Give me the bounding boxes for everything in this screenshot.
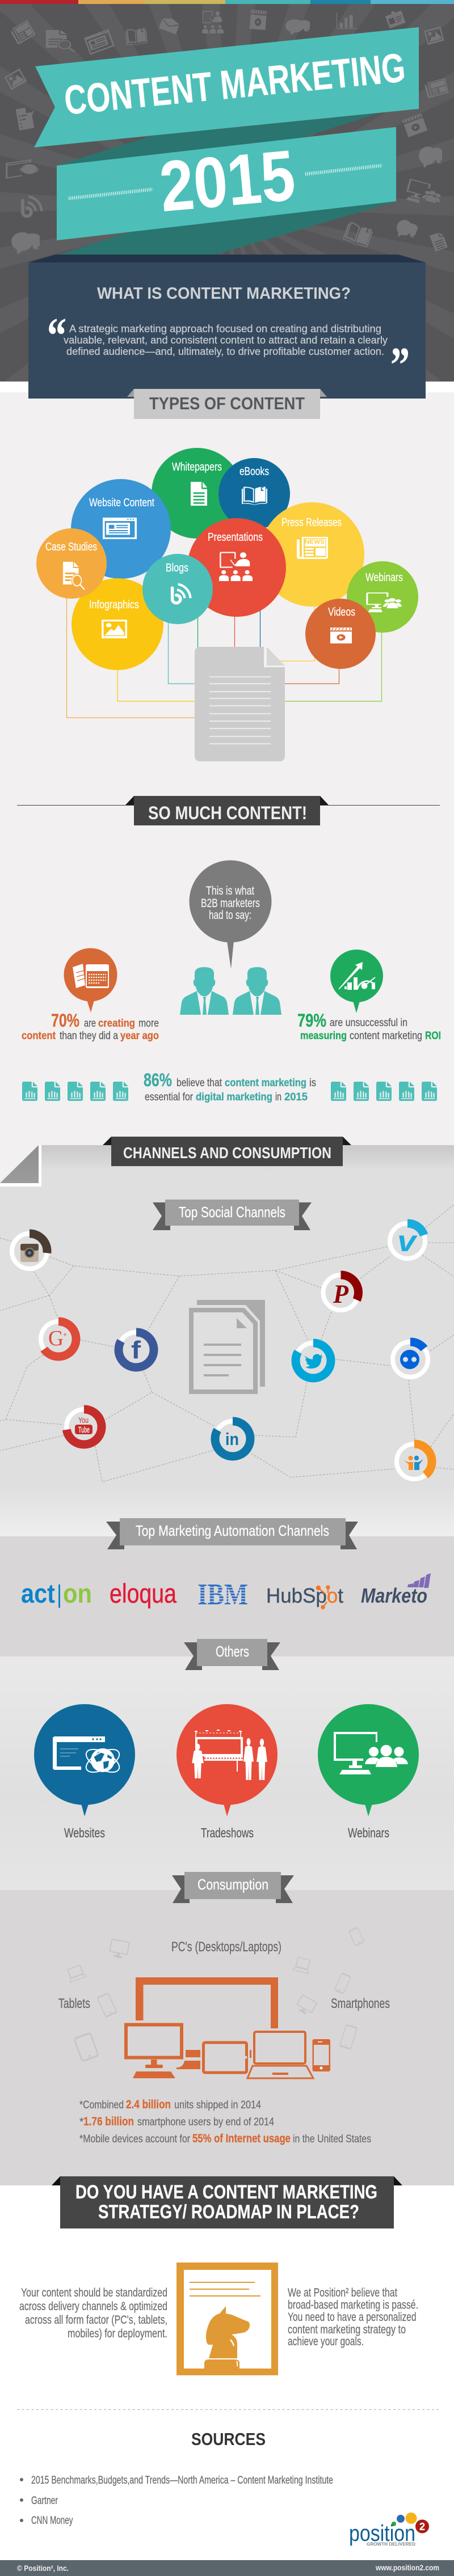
icon row right — [331, 1082, 437, 1101]
bubble: webinars: Webinars — [365, 571, 403, 584]
footer: www.position2.com — [375, 2563, 439, 2572]
ribbon: consumption — [172, 1872, 294, 1903]
stat text: more — [138, 1018, 159, 1029]
section background: marketing automation — [0, 1536, 454, 1656]
icon row left — [22, 1082, 128, 1101]
section background: consumption — [0, 1890, 454, 2185]
device: laptop — [66, 1964, 86, 1982]
stat text: are — [84, 1018, 96, 1029]
device: laptop — [293, 1956, 312, 1974]
icon: chat — [393, 218, 421, 243]
opening quote mark: “ — [47, 308, 66, 363]
definition text — [64, 323, 388, 357]
social: pinterest — [323, 1275, 359, 1310]
text block: position2 belief: achieve your goals. — [288, 2335, 364, 2348]
frame — [136, 1977, 278, 2028]
device: tablet — [74, 2033, 98, 2061]
ribbon: top marketing automation channels — [106, 1518, 358, 1549]
pin: calendar — [64, 948, 117, 1012]
stat text: year ago — [120, 1030, 159, 1042]
bubble: ebooks: eBooks — [239, 465, 269, 478]
consumption statistics: smartphone users by end of 2014 — [137, 2116, 274, 2128]
bubble: presentations — [187, 518, 286, 617]
phone — [312, 2039, 330, 2071]
stat text: 86% — [144, 1070, 172, 1090]
icon: book — [342, 221, 374, 249]
stat text: 70% — [51, 1010, 79, 1031]
icon: large document — [195, 647, 285, 761]
social: google plus: + — [63, 1331, 67, 1338]
icon: blog — [23, 197, 41, 216]
text block: standardized content: mobiles) for deployment. — [68, 2327, 167, 2340]
text block: standardized content: across all form factor (PC's, tablets, — [25, 2314, 167, 2327]
stat text: creating — [98, 1018, 135, 1029]
ribbon: content marketing title — [34, 27, 419, 255]
social: facebook: f — [131, 1336, 141, 1364]
bubble: videos — [305, 599, 376, 669]
logo: position2: 2 — [419, 2521, 425, 2532]
consumption statistics: 1.76 billion — [83, 2115, 134, 2128]
stat text: 79% — [297, 1010, 326, 1031]
text block: position2 belief: We at Position² believe that — [288, 2286, 397, 2299]
icon: trade show booth — [192, 1730, 267, 1780]
pin: webinars — [318, 1704, 419, 1840]
stat: 79 percent — [297, 950, 441, 1042]
social: youtube: Tube — [78, 1425, 90, 1435]
logo: marketo — [361, 1573, 431, 1607]
icon: orange devices — [126, 1977, 330, 2078]
callout: b2b marketers speech bubble — [190, 861, 271, 969]
faint background devices — [66, 1927, 364, 2061]
hero ray background — [0, 4, 454, 382]
stat text — [22, 1010, 159, 1042]
label: pcs: PC's (Desktops/Laptops) — [171, 1939, 281, 1955]
consumption statistics — [79, 2098, 371, 2145]
social: vimeo: v — [397, 1225, 418, 1258]
social: facebook — [119, 1332, 154, 1367]
heading: strategy question — [52, 2176, 402, 2228]
device: phone — [334, 1973, 351, 1994]
logo: ibm: IBM — [197, 1578, 248, 1611]
stat text: in — [275, 1091, 281, 1103]
stat text: is — [309, 1077, 316, 1089]
icon: document — [430, 231, 448, 252]
footer: © Position², Inc. — [17, 2564, 69, 2573]
tablet — [203, 2043, 251, 2073]
social: instagram — [12, 1234, 47, 1269]
heading: so much content: SO MUCH CONTENT! — [148, 803, 307, 823]
bubble: whitepapers: Whitepapers — [172, 461, 222, 473]
device: phone — [339, 2025, 358, 2049]
pin: websites — [34, 1704, 135, 1840]
text block: position2 belief — [288, 2286, 418, 2348]
year text: 2015 — [157, 135, 298, 227]
callout: b2b marketers speech bubble: B2B marketers — [201, 897, 260, 910]
stat text: are unsuccessful in — [330, 1017, 407, 1029]
bubble: press releases: Press Releases — [281, 516, 342, 529]
consumption statistics: 2.4 billion — [126, 2098, 171, 2111]
laptop — [247, 2032, 313, 2078]
label: Webinars — [348, 1825, 389, 1840]
bubble: presentations: Presentations — [208, 531, 263, 544]
bubble: website content: Website Content — [89, 497, 154, 509]
stat text: than they did a — [60, 1030, 118, 1042]
top colour bar — [0, 0, 454, 4]
bubble: case studies: Case Studies — [45, 541, 97, 553]
hatch left — [69, 189, 153, 198]
icon: webinar — [405, 179, 444, 208]
stat text — [297, 1010, 441, 1042]
stat text: measuring — [300, 1030, 347, 1042]
social: linkedin — [215, 1421, 250, 1456]
callout: b2b marketers speech bubble: had to say: — [209, 909, 251, 922]
icon: bar chart — [337, 12, 358, 29]
ribbon: others: Others — [216, 1643, 249, 1660]
hatch right — [305, 166, 382, 174]
heading: sources: SOURCES — [191, 2429, 266, 2449]
social: linkedin: in — [225, 1429, 239, 1449]
bubble: case studies — [36, 528, 107, 599]
desktop — [126, 2025, 182, 2078]
label: Websites — [64, 1825, 105, 1840]
ribbon fold two — [60, 201, 396, 255]
pin: tradeshows — [176, 1704, 278, 1840]
icon: browser globe — [7, 160, 39, 178]
bubble: videos: Videos — [328, 606, 355, 618]
consumption statistics: units shipped in 2014 — [174, 2099, 261, 2111]
ribbon: top marketing automation channels: Top Marketing Automation Channels — [136, 1522, 329, 1539]
stat text: believe that — [176, 1077, 222, 1089]
icon: envelope — [159, 15, 180, 35]
social: pinterest: P — [333, 1279, 349, 1309]
device: phone — [349, 1927, 364, 1946]
closing quote mark: ” — [390, 338, 410, 393]
pin: growth gauge — [330, 950, 383, 1013]
icon: calendar — [86, 964, 109, 988]
connectors — [176, 2050, 200, 2069]
logo: marketo: Marketo — [361, 1584, 427, 1607]
ribbon top — [34, 27, 419, 147]
icon: id badge — [384, 9, 406, 28]
social: google plus — [41, 1321, 76, 1357]
icon: central documents — [191, 1300, 265, 1392]
ribbon fold one — [57, 113, 378, 166]
label: smartphones: Smartphones — [331, 1996, 390, 2011]
icon: image — [424, 27, 444, 45]
bubble: blogs: Blogs — [166, 562, 188, 574]
heading: channels and consumption — [103, 1137, 351, 1166]
heading: strategy question: DO YOU HAVE A CONTENT MARKETING — [75, 2181, 377, 2203]
bubble: press releases — [260, 502, 364, 607]
ribbon: top social channels: Top Social Channels — [179, 1204, 285, 1221]
social: youtube: You — [78, 1416, 89, 1425]
bubble: website content — [71, 479, 171, 579]
device: monitor — [295, 1995, 317, 2016]
consumption labels — [58, 1939, 390, 2011]
social: slideshare — [397, 1444, 432, 1479]
stat text: essential for — [145, 1091, 194, 1103]
heading: strategy question: STRATEGY/ ROADMAP IN PLACE? — [98, 2201, 359, 2223]
panel: what is content marketing — [28, 255, 426, 399]
icon: browser — [84, 29, 115, 55]
icon: gauge — [358, 981, 375, 989]
ribbon: others — [184, 1639, 280, 1670]
page curl corner — [0, 1145, 41, 1192]
bubble: ebooks — [218, 458, 290, 529]
section background: channels — [0, 1145, 454, 1536]
definition text: defined audience—and, ultimately, to drive profitable customer action. — [66, 346, 384, 357]
icon: chat — [419, 147, 444, 168]
device: monitor — [109, 1939, 129, 1959]
network of dashed lines — [0, 1205, 454, 1482]
callout: b2b marketers speech bubble: This is what — [206, 884, 254, 897]
consumption statistics: in the United States — [293, 2133, 371, 2145]
ribbon bottom — [57, 127, 396, 240]
stat text: content — [22, 1030, 56, 1042]
page background: types of content — [0, 392, 454, 1145]
logo: act-on — [21, 1578, 92, 1608]
logo: hubspot: HubSpot — [266, 1584, 343, 1607]
heading: channels and consumption: CHANNELS AND CONSUMPTION — [123, 1144, 331, 1162]
social: youtube — [66, 1409, 102, 1444]
device: phone — [97, 1993, 117, 2017]
icon: chat — [11, 232, 42, 255]
stat: 70 percent — [22, 948, 159, 1042]
icon: paper — [73, 964, 85, 988]
hero background icons — [5, 9, 449, 255]
list: sources: Gartner — [31, 2495, 58, 2507]
icon: chat — [285, 19, 312, 35]
heading: types of content — [127, 389, 327, 419]
consumption statistics: *Mobile devices account for — [79, 2133, 191, 2145]
bubble: infographics: Infographics — [89, 599, 139, 611]
stat text: 2015 — [284, 1091, 308, 1103]
icon: news — [424, 78, 449, 98]
icon: doc search — [46, 30, 74, 52]
bubble: blogs — [142, 554, 213, 624]
consumption statistics: 55% of Internet usage — [192, 2132, 291, 2145]
social: vimeo — [390, 1223, 425, 1259]
icon: browser window — [53, 1736, 105, 1770]
logo: act-on: act — [21, 1578, 55, 1608]
stat: 86 percent — [22, 1070, 437, 1103]
stat text: content marketing — [225, 1077, 306, 1089]
bubble: press releases: NEWS — [305, 539, 325, 545]
panel heading: WHAT IS CONTENT MARKETING? — [97, 285, 351, 303]
logo: position2: GROWTH DELIVERED — [367, 2541, 415, 2547]
icon: globe — [83, 1745, 123, 1777]
chart: content type bubbles — [36, 448, 418, 670]
consumption statistics: *Combined — [79, 2099, 124, 2111]
icon: newspaper — [10, 20, 36, 45]
logo: eloqua: eloqua — [110, 1578, 177, 1608]
logo: act-on: on — [63, 1578, 92, 1608]
social: flickr — [393, 1342, 428, 1377]
section background: others — [0, 1656, 454, 1890]
text block: standardized content: Your content should be standardized — [21, 2286, 167, 2299]
social: google plus: G — [48, 1327, 64, 1350]
consumption statistics: * — [79, 2116, 84, 2128]
icon: doc pencil — [16, 107, 36, 130]
connector lines to document — [67, 595, 381, 718]
icon: video — [402, 113, 427, 137]
label: Tradeshows — [201, 1825, 254, 1840]
bubble: infographics — [72, 578, 163, 670]
list: sources: 2015 Benchmarks,Budgets,and Trends—North America – Content Marketing Institute — [31, 2475, 333, 2486]
text block: standardized content: across delivery channels & optimized — [19, 2300, 167, 2313]
definition text: A strategic marketing approach focused on creating and distributing — [69, 323, 381, 334]
panel body — [28, 262, 426, 399]
heading: so much content — [17, 796, 440, 825]
stat text: digital marketing — [196, 1091, 272, 1103]
text block: standardized content — [19, 2286, 167, 2340]
icon: webinar — [334, 1732, 408, 1774]
bubble: whitepapers — [152, 448, 242, 539]
icon: clapper — [250, 10, 267, 30]
label: tablets: Tablets — [58, 1996, 90, 2011]
social: twitter — [296, 1343, 331, 1378]
bubble: webinars — [347, 561, 418, 633]
stat text: content marketing — [350, 1030, 422, 1042]
heading: types of content: TYPES OF CONTENT — [149, 393, 305, 413]
stat text: ROI — [425, 1030, 441, 1042]
ribbon: consumption: Consumption — [197, 1876, 268, 1893]
list: sources — [20, 2475, 333, 2527]
stat text — [144, 1070, 316, 1103]
footer — [0, 2560, 454, 2576]
icon: strategy document with knight — [176, 2263, 278, 2375]
panel flap — [28, 255, 426, 262]
icon: image — [5, 69, 27, 90]
definition text: valuable, relevant, and consistent content to attract and retain a clearly — [64, 334, 388, 346]
icon: book — [125, 28, 148, 46]
ribbon: top social channels — [153, 1200, 312, 1230]
text block: position2 belief: content marketing strategy to — [288, 2323, 406, 2336]
icon: two business people — [180, 967, 281, 1015]
logo: position2: position — [349, 2521, 415, 2546]
icon: presenter — [202, 11, 224, 33]
list: sources: CNN Money — [31, 2515, 73, 2527]
icon: growth arrow — [338, 962, 363, 989]
